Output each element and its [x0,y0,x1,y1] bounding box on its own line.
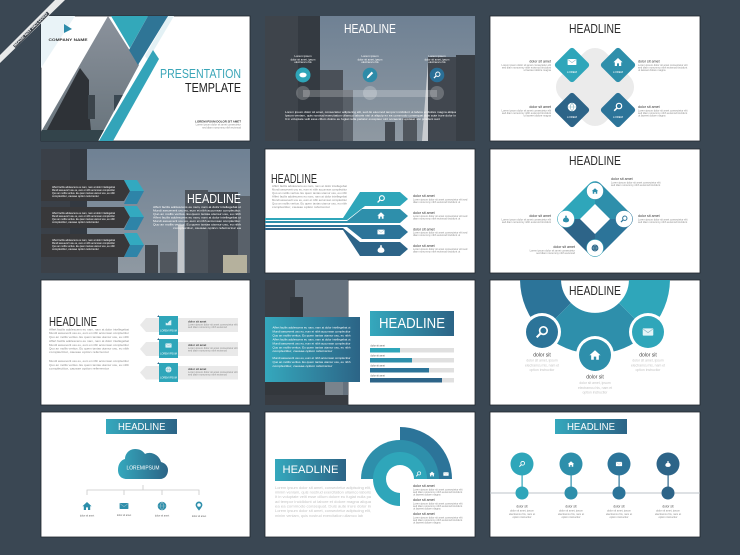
arrow labels: diam nonummy nibh euismod tincidunt ut [413,216,460,220]
paragraph [275,486,371,518]
paragraph: Affert facilis adolescens eu nam, nam at dolor intellegebat [49,339,129,343]
headline: HEADLINE [344,21,396,36]
chevron row 2: Affert facilis adolescens eu nam, nam at dolor intellegebat [52,211,115,215]
panel: timeline slide [490,412,700,537]
diamond: home [600,47,636,83]
icon: logo triangle [64,24,72,33]
panel: branching arrows slide [265,149,475,273]
timeline node 4: electramcu his, nam et [655,512,681,516]
paragraph: Affert facilis adolescens eu nam, nam at dolor intellegebat ut [153,205,241,209]
arrow labels: diam nonummy nibh euismod tincidunt ut [413,250,460,254]
paragraph: Quo an mollis veritus. Eu quem tantas utamur usu, eu nibh [49,335,130,339]
paragraph: ea ea commodo consequat. Duis aute irure dolor in [275,504,371,508]
paragraph: Mundi assueverit usu eu, eum et nibh accumsan complectitur [49,343,129,347]
panel: concentric arcs slide [265,412,475,537]
paragraph: Mundi assueverit usu eu, eum et nibh accumsan complectitur. [153,208,241,212]
text: top: Lorem ipsum dolor sit amet consectetur elit [611,180,661,184]
timeline node 3 [606,452,632,519]
item: left icon [291,54,316,82]
timeline node 2: option instructior [561,515,581,519]
text: center: electramcu his, nam et [578,386,612,390]
arc labels: Lorem ipsum dolor sit amet consectetur elit [413,488,463,492]
title: TEMPLATE [185,80,241,95]
text: top right: ut laoreet dolore magna [638,68,666,72]
text: right [631,352,665,372]
arc labels: sed diam nonummy nibh euismod tincidunt [413,504,462,508]
paragraph: Mundi assueverit usu eu, eum et nibh accumsan complectitur. [153,219,241,223]
tree connector [87,485,199,495]
teal triangle [111,16,148,48]
arc labels: Lorem ipsum dolor sit amet consectetur elit [413,502,463,506]
chart: concentric arcs [361,427,452,506]
arrow 2 [265,209,408,223]
paragraph [49,328,130,370]
paragraph: complectitur, causae option referrentur ea [173,226,242,230]
timeline node 3: dolor sit amet, ipsum [607,508,631,512]
arrow 4 [265,228,408,256]
paragraph: Quo an mollis veritus. Eu quem tantas utamur usu, eu nibh [272,202,348,206]
timeline node 4: dolor sit [662,504,674,508]
headline: HEADLINE [49,314,97,329]
arrow labels [413,194,468,254]
item: left icon: Lorem ipsum [294,54,312,58]
paragraph: Affert facilis adolescens eu nam, nam at dolor intellegebat [272,194,347,198]
text: right [638,214,688,224]
item: middle icon: Lorem ipsum [361,54,379,58]
paragraph: Quo an mollis veritus. Eu quem tantas utamur usu, eu nibh [153,212,242,216]
timeline node 4: dolor sit amet, ipsum [656,508,680,512]
text: bottom right: Lorem ipsum dolor sit amet consectetur elit [638,108,688,112]
photo: city skyline in angular frame [41,16,141,141]
title: PRESENTATION [160,66,241,81]
timeline node 3: option instructior [609,515,629,519]
ribbon row 3: Lorem ipsum dolor sit amet consectetur elit [188,370,238,374]
panel: photo slide with three icons [265,16,475,141]
node: home [576,336,614,374]
arrow labels: Lorem ipsum dolor sit amet consectetur elit sed [413,214,468,218]
text: bottom left: ut laoreet dolore magna [524,114,552,118]
diamond: globe [554,92,590,128]
item: mail: dolor sit amet [117,514,132,517]
ribbon row 2: Lorem ipsum dolor sit amet consectetur elit [188,346,238,350]
diamond: mail [554,47,590,83]
arc labels: ut laoreet dolore magna [413,492,441,496]
text: bottom right [638,105,688,118]
headline box: HEADLINE [282,464,338,476]
text: top right: sed diam nonummy nibh euismod tincidunt [638,66,687,70]
panel: photo slide with chevrons [41,149,250,273]
text: top right: dolor sit amet [638,60,660,64]
diamond: mail: LOREM [567,70,578,74]
node: mail [629,313,667,351]
cover text block: LOREM IPSUM DOLOR SIT AMET [195,120,241,124]
ribbon row 2: sed diam nonummy nibh euismod [188,348,227,352]
arrow 1 [265,192,408,220]
timeline node 2: electramcu his, nam et [558,512,584,516]
text: bottom: Lorem ipsum dolor sit amet consectetur [530,248,575,252]
arrow 3 [265,225,408,239]
arrow labels: Lorem ipsum dolor sit amet consectetur elit sed [413,230,468,234]
corner banner: image not included: IMAGE NOT INCLUDED [13,12,49,47]
grey backing shape [550,42,640,132]
item: globe [155,502,170,518]
paragraph: Mundi assueverit usu eu, eum et nibh accumsan complectitur [272,198,347,202]
paragraph: Mundi assueverit usu eu, eum et nibh accumsan complectitur [49,331,129,335]
ribbon row 1: sed diam nonummy nibh euismod [188,325,227,329]
chevron row 3: Mundi assueverit usu eu, eum et nibh accumsan complectitur [52,241,115,245]
arc labels: dolor sit amet [413,484,435,488]
corner banner: image not included [0,0,65,63]
text: bottom: sed diam nonummy nibh euismod [536,251,576,255]
ribbon row 1: Lorem ipsum dolor sit amet consectetur elit [188,322,238,326]
headline box [106,419,177,434]
ribbon row 1: LOREM IPSUM [160,330,177,332]
paragraph: complectitur, causae option referrentur [49,366,109,370]
text: center [578,374,612,394]
arc labels: dolor sit amet [413,498,435,502]
teal text box: Quo an mollis veritus. Eu quem tantas utamur usu, eu nibh [272,360,351,364]
arrow labels: diam nonummy nibh euismod tincidunt ut [413,200,460,204]
arrow labels: diam nonummy nibh euismod tincidunt ut [413,233,460,237]
ribbon row 1: dolor sit amet [188,320,206,324]
title [160,66,241,95]
arc labels: sed diam nonummy nibh euismod tincidunt [413,490,462,494]
text: right: Lorem ipsum dolor sit amet consectetur elit [638,218,688,222]
panel: cover slide [41,16,250,141]
panel: four diamonds slide [490,16,700,141]
text: center: option instructior [583,390,608,394]
company name: COMPANY NAME [48,37,88,42]
paragraph: complectitur, causae option referrentur [49,350,109,354]
light connector band [296,86,444,100]
diamond: home: LOREM [613,70,624,74]
paragraph: Affert facilis adolescens eu nam, nam at dolor intellegebat ut [153,216,241,220]
headline: HEADLINE [569,21,621,36]
ribbon row 1 [140,315,238,335]
ribbon row 3: LOREM IPSUM [160,376,177,380]
chevron row 2: Quo an mollis veritus. Eu quem tantas utamur usu, eu nibh [52,217,115,221]
teal text box: Quo an mollis veritus. Eu quem tantas utamur usu, eu nibh [272,334,351,338]
text: top left: Lorem ipsum dolor sit amet consectetur elit [502,63,551,67]
teal diagonal band [99,50,159,141]
bar chart: dolor sit amet [370,354,385,358]
arc labels: ut laoreet dolore magna [413,506,441,510]
item: middle icon: electramcu his [361,60,379,64]
chevron row 2: Mundi assueverit usu eu, eum et nibh accumsan complectitur [52,214,115,218]
paragraph: Lorem ipsum dolor sit amet, consectetur adipiscing elit, [275,509,371,513]
arrow labels: dolor sit amet [413,211,435,215]
paragraph: ad tempor incididunt ut labore et dolore magna aliqua [275,500,371,504]
paragraph: complectitur, causae option referrentur [272,205,330,209]
text: right: dolor sit amet, ipsum [632,358,664,362]
node: search [523,313,561,351]
text: top left: dolor sit amet [529,60,551,64]
panel: semicircle ring slide [490,279,700,405]
text: right: option instructior [636,368,661,372]
headline: HEADLINE [569,153,621,168]
text: right: sed diam nonummy nibh euismod tincidunt [638,220,687,224]
item: right icon: Lorem ipsum [428,54,446,58]
text: top left [502,60,552,72]
bar chart: dolor sit amet [370,364,385,368]
text: left: dolor sit amet, ipsum [526,358,558,362]
headline: HEADLINE [569,283,621,298]
diamond: search [600,92,636,128]
text: top left: sed diam nonummy nibh euismod tincidunt [502,66,551,70]
bar chart: dolor sit amet [370,374,385,378]
paragraph: Quo an mollis veritus. Eu quem tantas utamur usu, eu nibh [49,363,130,367]
item: pin [192,502,207,518]
text: bottom left: Lorem ipsum dolor sit amet consectetur elit [502,108,551,112]
teal text box: Quo an mollis veritus. Eu quem tantas utamur usu, eu nibh [272,346,351,350]
headline box [370,311,454,336]
headline box: HEADLINE [567,422,615,433]
paragraph: Lorem ipsum dolor sit amet, consectetur adipiscing elit, sed do eiusmod tempor incididunt ut labore et dolore magna aliqua [285,110,457,114]
paragraph: Mundi assueverit usu eu, eum et nibh accumsan complectitur [272,188,347,192]
text: right: electramcu his, nam et [631,364,665,368]
photo [265,280,348,405]
paragraph: Quo an mollis veritus. Eu quem tantas utamur usu, eu nibh [153,222,242,226]
paragraph: Lorem ipsum dolor sit amet, consectetur adipiscing elit, [275,486,371,490]
cover text block: sed diam nonummy nibh euismod [202,126,242,130]
text: right: dolor sit amet [638,214,660,218]
bar chart: dolor sit amet [370,344,385,348]
paragraph [153,205,242,230]
timeline node 2: dolor sit [565,504,577,508]
arrow labels: Lorem ipsum dolor sit amet consectetur elit sed [413,247,468,251]
paragraph: Quo an mollis veritus. Eu quem tantas utamur usu, eu nibh [49,346,130,350]
teal text box [265,317,360,382]
headline box: HEADLINE [118,422,166,433]
item: left icon: electramcu his [294,60,312,64]
paragraph: Mundi assueverit usu eu, eum et nibh accumsan complectitur [49,359,129,363]
ribbon row 2: LOREM IPSUM [160,352,177,356]
timeline node 1: dolor sit amet, ipsum [510,508,534,512]
item: left icon: dolor sit amet, ipsum [291,58,316,62]
timeline node 1 [509,452,535,519]
timeline node 1: electramcu his, nam et [509,512,535,516]
item: right icon: electramcu his [428,60,446,64]
arc labels: sed diam nonummy nibh euismod tincidunt [413,518,462,522]
timeline axis [490,492,700,494]
headline box: HEADLINE [379,315,445,332]
arc labels [413,484,463,524]
arrow labels: Lorem ipsum dolor sit amet consectetur elit sed [413,198,468,202]
text: bottom [530,245,576,255]
arrow labels: dolor sit amet [413,194,435,198]
chevron row 1: Affert facilis adolescens eu nam, nam at dolor intellegebat [52,185,115,189]
bar chart [370,344,454,382]
chevron row 3: complectitur, causae option referrentur [52,247,99,251]
timeline node 4: option instructior [658,515,678,519]
cloud: LOREMIPSUM [126,466,160,472]
item: mail [117,503,132,517]
chevron row 2 [41,206,144,230]
node: bag [558,210,574,228]
headline box [555,419,627,434]
text: center: dolor sit amet, ipsum [579,381,611,385]
chevron row 1 [41,180,144,204]
timeline node 1: option instructior [512,515,532,519]
timeline node 2 [558,452,584,519]
cloud [118,449,168,479]
item: middle icon: dolor sit amet, ipsum [358,58,383,62]
text: top: dolor sit amet [611,177,633,181]
text: right: dolor sit [639,352,657,358]
paragraph [285,110,457,121]
arrow labels: dolor sit amet [413,244,435,248]
paragraph: minim veniam, quis nostrud exercitation ullamco laboris [275,490,371,494]
paragraph: Quo an mollis veritus. Eu quem tantas utamur usu, eu nibh [272,191,348,195]
chevron row 3: Quo an mollis veritus. Eu quem tantas utamur usu, eu nibh [52,244,115,248]
text: top [611,177,661,187]
chevron row 3: Affert facilis adolescens eu nam, nam at dolor intellegebat [52,238,115,242]
node: home [586,182,604,200]
ring segments [520,279,670,354]
teal text box: Mundi assueverit usu eu, eum et nibh accumsan complectitur [272,356,351,360]
chevron row 1: complectitur, causae option referrentur [52,194,99,198]
ribbon row 2 [140,338,238,358]
text: left: electramcu his, nam et [525,364,559,368]
chevron row 2: complectitur, causae option referrentur [52,220,99,224]
ribbon row 3: sed diam nonummy nibh euismod [188,372,227,376]
text: left: dolor sit [533,352,551,358]
paragraph: Affert facilis adolescens eu nam, nam at dolor intellegebat [272,184,347,188]
text: bottom right: sed diam nonummy nibh euismod tincidunt [638,111,687,115]
diamond: search: LOREM [613,115,624,119]
teal text box: complectitur, causae option referrentur [272,349,333,353]
cover text block: Lorem ipsum dolor sit amet consectetur [196,122,241,126]
text: bottom left [502,105,552,118]
text: bottom left: dolor sit amet [529,105,551,109]
arc labels: Lorem ipsum dolor sit amet consectetur elit [413,516,463,520]
arc labels: ut laoreet dolore magna [413,520,441,524]
diamond: globe: LOREM [567,115,578,119]
item: home: dolor sit amet [80,514,95,518]
panel: rounded diamond cycle slide [490,149,700,273]
text: left: Lorem ipsum dolor sit amet consectetur elit [502,218,551,222]
diamond ring [557,181,633,257]
panel: three ribbons slide [41,280,250,405]
headline: HEADLINE [187,191,241,206]
text: bottom right: dolor sit amet [638,105,660,109]
text: bottom: dolor sit amet [553,245,575,249]
panel: cloud tree slide [41,412,250,537]
item: home [80,502,95,518]
paragraph: Ipsum veniam, quis nostrud exercitation ullamco laboris nisi ut aliquip ex ea commodo consequat duis aute irure dolor in [285,114,457,118]
text: top right [638,60,688,72]
item: globe: dolor sit amet [155,514,170,518]
timeline node 4 [655,452,681,519]
photo background [298,16,475,141]
chevron row 1: Quo an mollis veritus. Eu quem tantas utamur usu, eu nibh [52,191,115,195]
teal text box: Affert facilis adolescens eu nam, nam at dolor intellegebat ut [272,338,351,342]
item: middle icon [358,54,383,82]
item: right icon [425,54,450,82]
ribbon row 3: dolor sit amet [188,367,206,371]
cover text block [195,120,242,130]
ribbon row 2: dolor sit amet [188,343,206,347]
text: left: option instructior [530,368,555,372]
text: top left: ut laoreet dolore magna [524,68,552,72]
headline box [275,459,346,481]
arc labels: dolor sit amet [413,512,435,516]
panel: progress bars slide [265,280,475,405]
chevron row 1: Mundi assueverit usu eu, eum et nibh accumsan complectitur [52,188,115,192]
chevron row 3 [41,233,144,257]
text: left: sed diam nonummy nibh euismod tincidunt [502,220,551,224]
photo background [41,149,250,273]
teal text box: Mundi assueverit usu eu, eum et nibh accumsan complectitur [272,330,351,334]
item: pin: dolor sit amet [192,515,207,518]
text: left [525,352,559,372]
paragraph: Affert facilis adolescens eu nam, nam at dolor intellegebat [49,328,129,332]
paragraph [272,184,348,209]
text: top: sed diam nonummy nibh euismod tincidunt [611,183,660,187]
timeline node 1: dolor sit [516,504,528,508]
paragraph: It in voluptate velit esse cillum dolore eu fugiat nulla pariatur excepteur sint occaecat cupidatat non proident sunt [285,117,440,121]
ribbon row 3 [140,362,238,382]
teal text box: complectitur, causae option referrentur [272,364,333,368]
teal text box: Affert facilis adolescens eu nam, nam at dolor intellegebat ut [272,326,351,330]
headline: HEADLINE [271,171,317,186]
arrow labels: dolor sit amet [413,228,435,232]
text: bottom left: sed diam nonummy nibh euismod tincidunt [502,111,551,115]
text: center: dolor sit [586,374,604,380]
dark teal band [129,16,168,65]
timeline node 2: dolor sit amet, ipsum [559,508,583,512]
node: search [616,210,632,228]
text: left [502,214,551,224]
node: globe [586,240,604,256]
paragraph: It in voluptate velit esse cillum dolore eu fugiat nulla pa [275,495,371,499]
timeline node 3: dolor sit [613,504,625,508]
text: left: dolor sit amet [529,214,551,218]
teal text box: Mundi assueverit usu eu, eum et nibh accumsan complectitur [272,342,351,346]
text: top right: Lorem ipsum dolor sit amet consectetur elit [638,63,688,67]
item: right icon: dolor sit amet, ipsum [425,58,450,62]
text: bottom right: ut laoreet dolore magna [638,114,666,118]
timeline node 3: electramcu his, nam et [606,512,632,516]
paragraph: minim veniam, quis nostrud exercitation ullamco lab [275,514,363,518]
